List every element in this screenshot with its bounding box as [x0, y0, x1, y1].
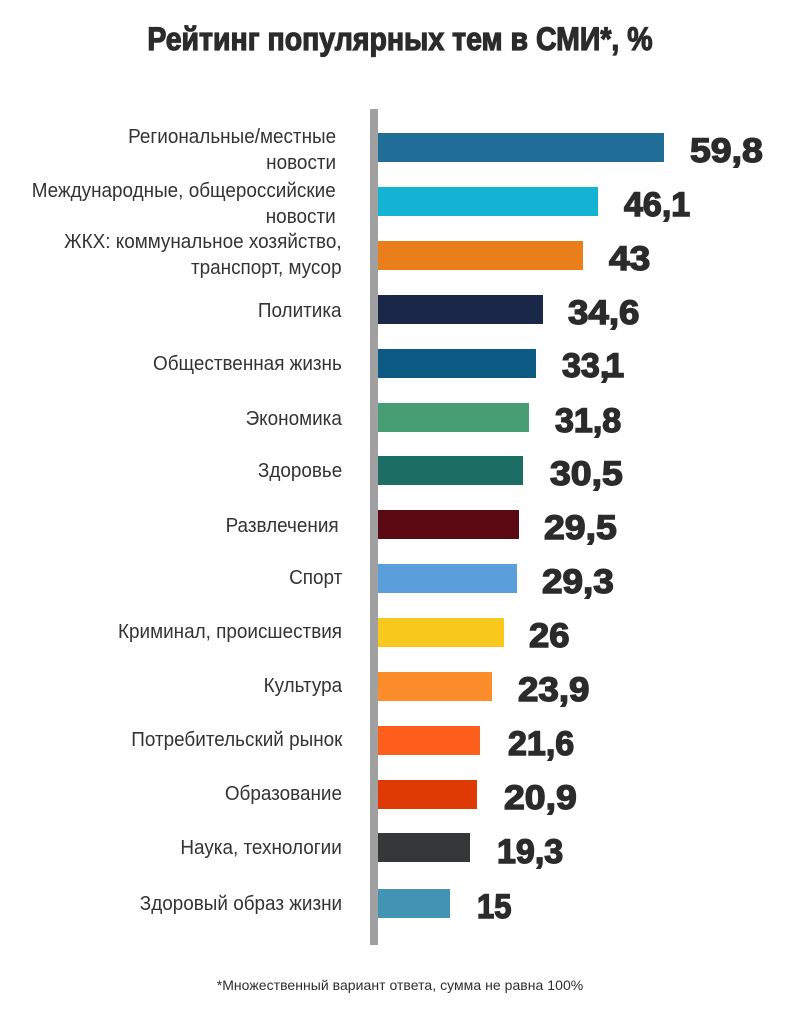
- label: international news: новости: [266, 206, 336, 228]
- bar: entertainment: [378, 510, 519, 539]
- bar: science: [378, 833, 470, 862]
- label: sport: Спорт: [289, 567, 342, 589]
- value: public life: 33,1: [562, 347, 624, 385]
- bar: sport: [378, 564, 517, 593]
- bar: crime: [378, 618, 504, 647]
- value: international news: 46,1: [624, 186, 690, 224]
- label: entertainment: Развлечения: [226, 515, 339, 537]
- title: Рейтинг популярных тем в СМИ*, %: [147, 20, 653, 56]
- bar: education: [378, 780, 477, 809]
- label: education: Образование: [225, 783, 342, 805]
- label: housing: [64, 231, 342, 279]
- label: public life: Общественная жизнь: [153, 353, 342, 375]
- axis line: [370, 109, 378, 945]
- label: consumer market: Потребительский рынок: [131, 729, 342, 751]
- label: culture: Культура: [263, 675, 342, 697]
- label: economy: Экономика: [246, 408, 342, 430]
- label: politics: Политика: [258, 300, 342, 322]
- bar: health: [378, 456, 523, 485]
- bar: healthy lifestyle: [378, 889, 450, 918]
- bar: culture: [378, 672, 492, 701]
- label: regional news: новости: [266, 152, 336, 174]
- bar: housing: [378, 241, 583, 270]
- value: science: 19,3: [497, 833, 563, 871]
- label: regional news: [128, 126, 336, 174]
- value: entertainment: 29,5: [544, 509, 617, 547]
- label: healthy lifestyle: Здоровый образ жизни: [140, 893, 342, 915]
- label: crime: Криминал, происшествия: [118, 621, 342, 643]
- bar: consumer market: [378, 726, 480, 755]
- value: economy: 31,8: [555, 402, 621, 440]
- value: housing: 43: [609, 240, 650, 278]
- bar: international news: [378, 187, 598, 216]
- footnote: *Множественный вариант ответа, сумма не равна 100%: [217, 977, 583, 993]
- value: education: 20,9: [504, 779, 577, 817]
- value: culture: 23,9: [518, 671, 589, 709]
- label: international news: [32, 180, 336, 228]
- bar: politics: [378, 295, 543, 324]
- label: regional news: Региональные/местные: [128, 126, 336, 148]
- value: sport: 29,3: [542, 563, 614, 601]
- label: science: Наука, технологии: [181, 837, 342, 859]
- value: politics: 34,6: [568, 294, 639, 332]
- label: housing: ЖКХ: коммунальное хозяйство,: [65, 231, 342, 253]
- bar: public life: [378, 349, 536, 378]
- bar: regional news: [378, 133, 664, 162]
- label: international news: Международные, общероссийские: [32, 180, 336, 202]
- bar: economy: [378, 403, 529, 432]
- value: healthy lifestyle: 15: [477, 888, 511, 926]
- label: housing: транспорт, мусор: [191, 257, 342, 279]
- value: regional news: 59,8: [690, 132, 763, 170]
- value: crime: 26: [529, 617, 569, 655]
- value: consumer market: 21,6: [508, 725, 574, 763]
- value: health: 30,5: [550, 455, 623, 493]
- label: health: Здоровье: [258, 460, 342, 482]
